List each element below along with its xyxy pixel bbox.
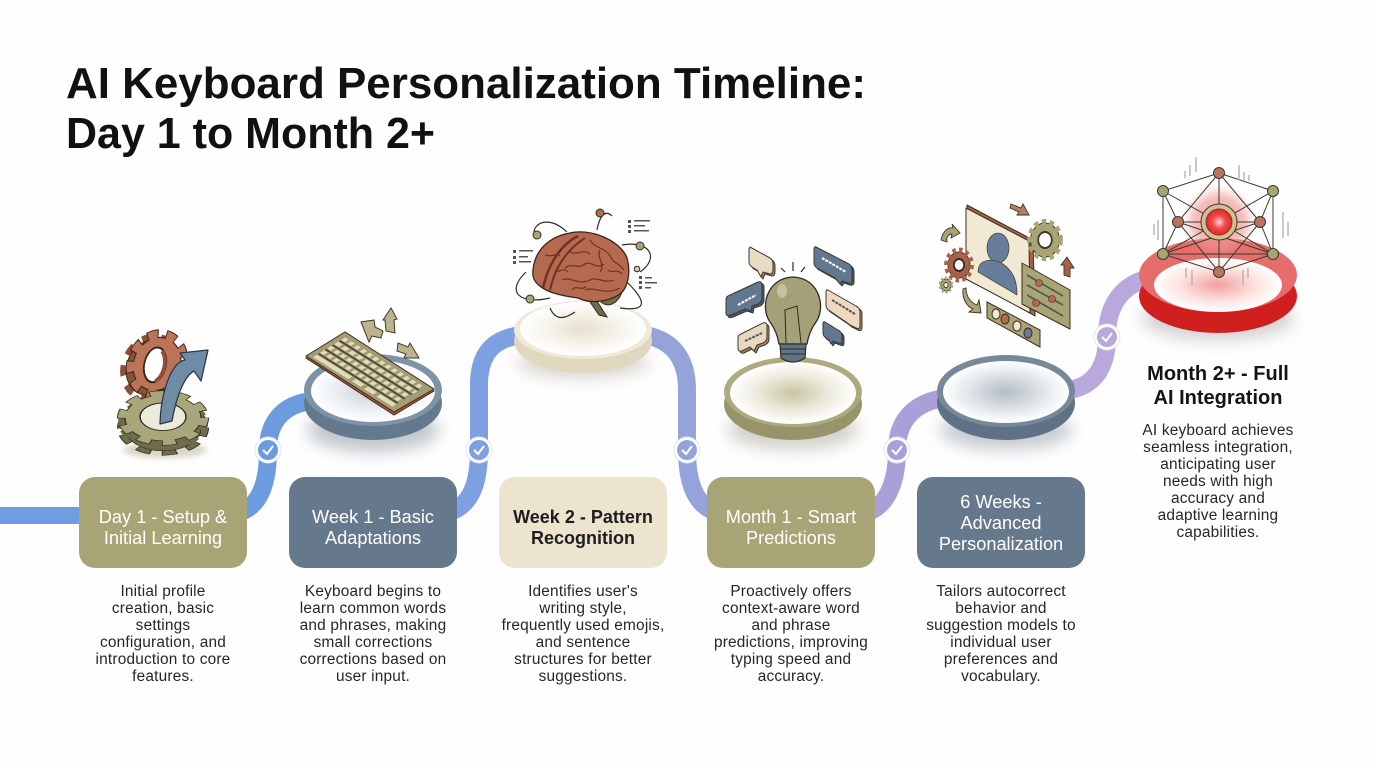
heading: Day 1: Initial Learning	[104, 528, 222, 548]
icon: check 4	[884, 437, 910, 463]
description: Week 2: frequently used emojis,	[502, 617, 664, 634]
title	[66, 59, 866, 158]
description: Week 1: corrections based on	[300, 651, 446, 668]
heading: Month 1: Predictions	[746, 528, 836, 548]
card: Day 1	[79, 477, 247, 568]
platform: lightbulb disc	[724, 357, 862, 450]
description: Week 1: user input.	[336, 668, 410, 685]
description: Day 1: introduction to core	[96, 651, 230, 668]
platform: keyboard disc	[304, 354, 442, 452]
heading: Month 2+: Month 2+ - Full	[1147, 363, 1289, 385]
description: Week 2: and sentence	[536, 634, 630, 651]
step 4: Month 1	[707, 247, 875, 685]
description: Week 2: suggestions.	[539, 668, 627, 685]
milestone checks	[255, 324, 1120, 463]
description: Day 1: settings	[136, 617, 190, 634]
step 5: 6 Weeks	[917, 204, 1085, 685]
description: Month 1: Proactively offers	[730, 583, 852, 600]
heading: Week 1: Adaptations	[325, 528, 421, 548]
description: 6 Weeks: preferences and	[944, 651, 1058, 668]
description: Week 2: Identifies user's	[528, 583, 638, 600]
description: Month 1: and phrase	[751, 617, 831, 634]
description: 6 Weeks: vocabulary.	[961, 668, 1041, 685]
description: Month 2+: capabilities.	[1176, 524, 1260, 541]
card: 6 Weeks	[917, 477, 1085, 568]
description: 6 Weeks: suggestion models to	[926, 617, 1076, 634]
icon: small legends	[513, 220, 657, 289]
step 6: Month 2+	[1139, 157, 1297, 541]
title: Day 1 to Month 2+	[66, 109, 435, 158]
description: Day 1: features.	[132, 668, 194, 685]
heading: Week 2: Week 2 - Pattern	[513, 507, 653, 527]
card: Week 2	[499, 477, 667, 568]
description: 6 Weeks: individual user	[950, 634, 1052, 651]
description: Month 2+: seamless integration,	[1143, 439, 1293, 456]
description: Month 2+: AI keyboard achieves	[1142, 422, 1294, 439]
heading: 6 Weeks: Advanced	[961, 513, 1041, 533]
icon: neural network	[1154, 157, 1288, 286]
step 3: Week 2	[499, 209, 667, 685]
heading: Week 2: Recognition	[531, 528, 635, 548]
step 2: Week 1	[289, 308, 457, 685]
description: Month 1: accuracy.	[758, 668, 824, 685]
description: Month 1: typing speed and	[731, 651, 851, 668]
description: Month 1: predictions, improving	[714, 634, 868, 651]
platform: red disc	[1139, 238, 1297, 340]
heading: Week 1: Week 1 - Basic	[312, 507, 434, 527]
heading: 6 Weeks: 6 Weeks -	[960, 492, 1042, 512]
heading: Month 2+: AI Integration	[1154, 387, 1282, 409]
icon: direction arrows	[361, 308, 419, 358]
description: Day 1: Initial profile	[120, 583, 206, 600]
icon: check 2	[466, 437, 492, 463]
icon: keyboard	[306, 332, 434, 415]
description: Week 1: and phrases, making	[300, 617, 446, 634]
description: Day 1: configuration, and	[100, 634, 226, 651]
card: Week 1	[289, 477, 457, 568]
icon: sliders panel	[1022, 263, 1070, 329]
description: Week 2: structures for better	[514, 651, 652, 668]
description: Week 1: Keyboard begins to	[305, 583, 441, 600]
description: Month 2+: needs with high	[1163, 473, 1273, 490]
description: Month 2+: adaptive learning	[1158, 507, 1278, 524]
card: Month 1	[707, 477, 875, 568]
icon: check 1	[255, 437, 281, 463]
description: Month 2+: accuracy and	[1171, 490, 1265, 507]
description: Week 1: learn common words	[300, 600, 446, 617]
heading: Month 1: Month 1 - Smart	[726, 507, 856, 527]
icon: check 5	[1094, 324, 1120, 350]
description: Week 2: writing style,	[538, 600, 627, 617]
icon: rotation arrows	[941, 204, 1074, 313]
timeline path	[0, 278, 1150, 524]
icon: check 3	[674, 437, 700, 463]
description: Month 2+: anticipating user	[1160, 456, 1276, 473]
icon: buttons panel	[987, 302, 1040, 347]
platform: brain disc	[514, 301, 652, 378]
description: Week 1: small corrections	[314, 634, 433, 651]
heading: Day 1: Day 1 - Setup &	[99, 507, 227, 527]
description: Month 1: context-aware word	[722, 600, 860, 617]
platform: personalization disc	[937, 355, 1075, 450]
icon: gears and arrow	[120, 332, 208, 458]
description: 6 Weeks: behavior and	[955, 600, 1047, 617]
icon: brain	[516, 209, 650, 318]
icon: gears	[940, 222, 1060, 292]
icon: chat bubbles	[726, 247, 862, 353]
description: 6 Weeks: Tailors autocorrect	[936, 583, 1066, 600]
icon: user profile panel	[966, 205, 1035, 316]
icon: lightbulb	[765, 262, 821, 362]
step 1: Day 1	[79, 332, 247, 685]
description: Day 1: creation, basic	[112, 600, 214, 617]
title: AI Keyboard Personalization Timeline:	[66, 59, 866, 108]
heading: 6 Weeks: Personalization	[939, 534, 1063, 554]
